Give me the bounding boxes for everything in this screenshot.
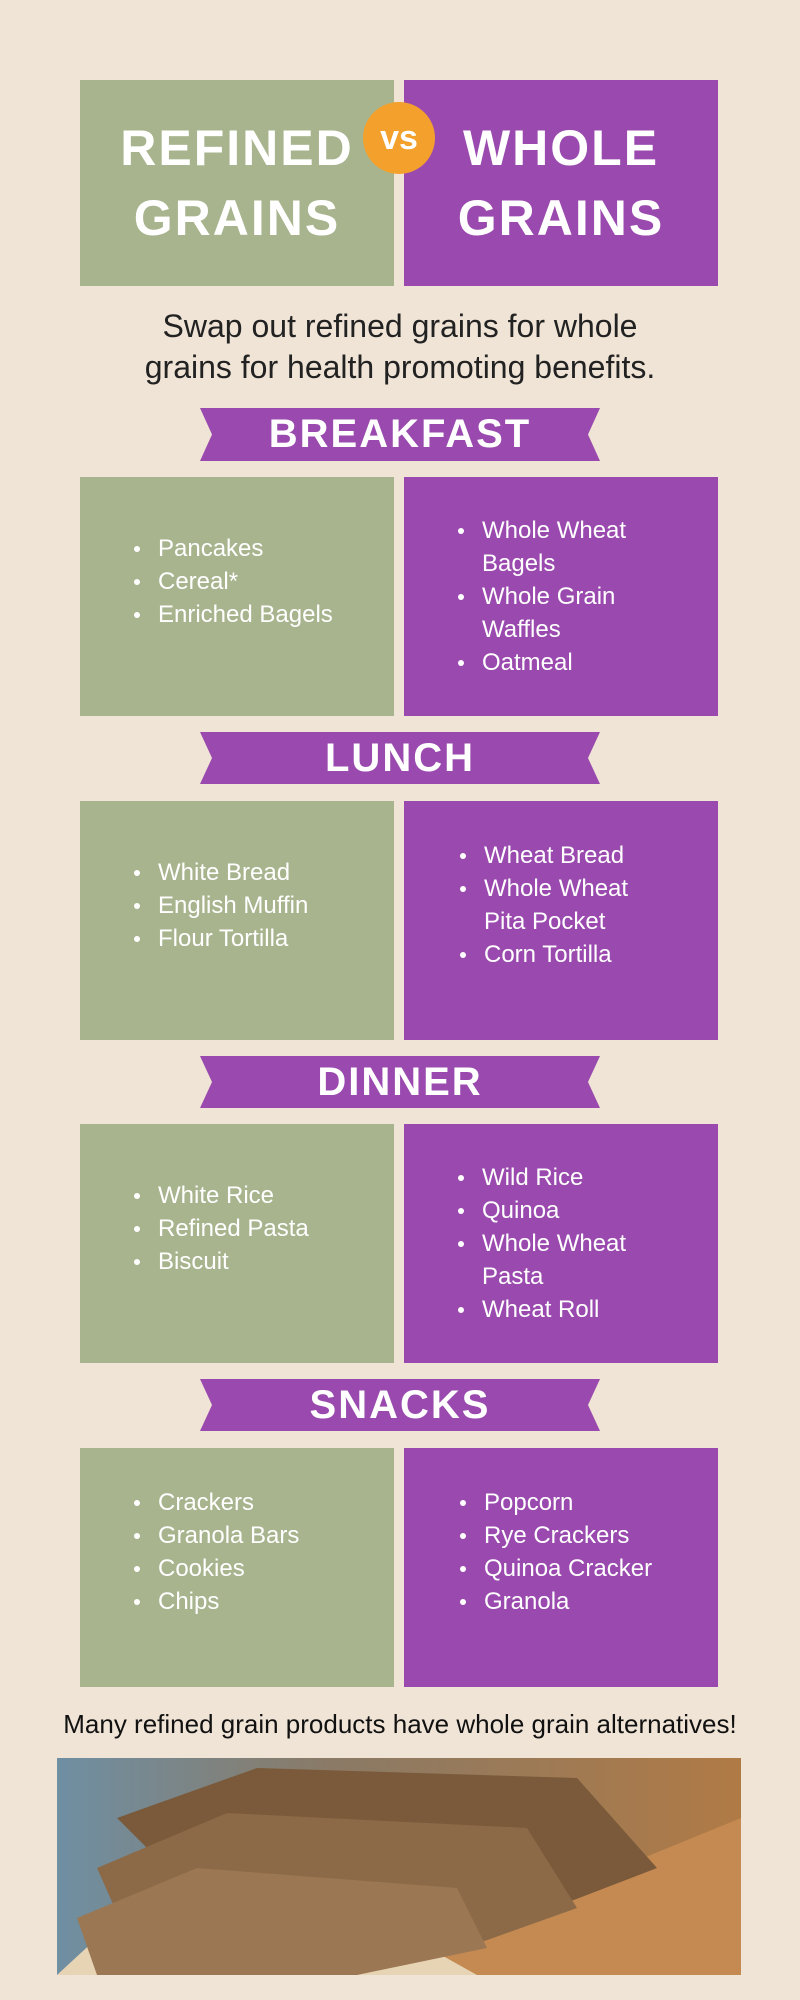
panel: snacks refined: Chips (158, 1588, 219, 1615)
panel: snacks whole: Granola (484, 1588, 569, 1615)
panel: lunch whole: Whole Wheat Pita Pocket (484, 875, 628, 935)
header: whole grains: GRAINS (458, 190, 664, 246)
panel: snacks whole: Quinoa Cracker (484, 1555, 652, 1582)
header: refined grains: REFINED (120, 120, 354, 176)
header: whole grains (404, 80, 718, 286)
panel: dinner whole: Quinoa (482, 1197, 559, 1224)
footer text: Many refined grain products have whole grain alternatives! (63, 1709, 737, 1739)
banner: lunch: LUNCH (325, 736, 475, 780)
banner: breakfast: BREAKFAST (269, 412, 531, 456)
panel: breakfast refined: Pancakes (158, 535, 263, 562)
panel: dinner whole: Wheat Roll (482, 1296, 599, 1323)
panel: lunch refined: English Muffin (158, 892, 308, 919)
panel: breakfast whole: Whole Wheat Bagels (482, 517, 626, 577)
panel: snacks refined (80, 1448, 394, 1687)
banner: dinner (200, 1056, 600, 1108)
panel: snacks whole (404, 1448, 718, 1687)
panel: breakfast whole: Oatmeal (482, 649, 573, 676)
panel: dinner refined: White Rice (158, 1182, 274, 1209)
header: refined grains: GRAINS (134, 190, 340, 246)
banner: snacks (200, 1379, 600, 1431)
banner: snacks: SNACKS (310, 1383, 490, 1427)
panel: snacks whole: Rye Crackers (484, 1522, 629, 1549)
panel: lunch refined: White Bread (158, 859, 290, 886)
panel: lunch whole (404, 801, 718, 1040)
panel: breakfast whole (404, 477, 718, 716)
panel: dinner whole: Whole Wheat Pasta (482, 1230, 626, 1290)
panel: snacks refined: Cookies (158, 1555, 245, 1582)
panel: snacks refined: Crackers (158, 1489, 254, 1516)
subtitle (145, 308, 655, 385)
panel: dinner refined: Refined Pasta (158, 1215, 309, 1242)
panel: dinner whole (404, 1124, 718, 1363)
panel: breakfast refined: Enriched Bagels (158, 601, 333, 628)
banner: dinner: DINNER (317, 1060, 483, 1104)
panel: lunch refined: Flour Tortilla (158, 925, 288, 952)
icon: vs circle: vs (380, 119, 418, 157)
panel: lunch refined (80, 801, 394, 1040)
header: refined grains (80, 80, 394, 286)
panel: dinner refined (80, 1124, 394, 1363)
banner: breakfast (200, 408, 600, 461)
panel: breakfast refined: Cereal* (158, 568, 238, 595)
panel: dinner refined: Biscuit (158, 1248, 229, 1275)
photo: sliced bread (57, 1758, 741, 1975)
panel: snacks whole: Popcorn (484, 1489, 573, 1516)
icon: vs circle (363, 102, 435, 174)
panel: breakfast whole: Whole Grain Waffles (482, 583, 615, 643)
subtitle: Swap out refined grains for whole (163, 308, 637, 344)
panel: snacks refined: Granola Bars (158, 1522, 299, 1549)
panel: breakfast refined (80, 477, 394, 716)
banner: lunch (200, 732, 600, 784)
header: whole grains: WHOLE (463, 120, 659, 176)
panel: dinner whole: Wild Rice (482, 1164, 583, 1191)
panel: lunch whole: Wheat Bread (484, 842, 624, 869)
panel: lunch whole: Corn Tortilla (484, 941, 612, 968)
subtitle: grains for health promoting benefits. (145, 349, 655, 385)
